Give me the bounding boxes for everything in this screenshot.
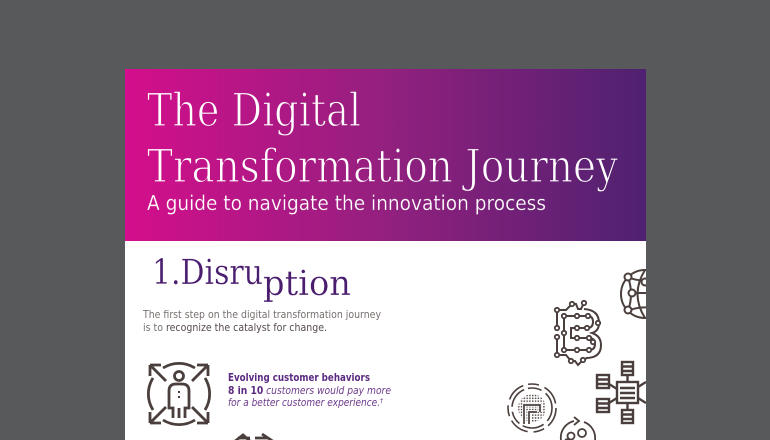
intro text: is to recognize the catalyst for change. <box>143 321 327 334</box>
title: Transformation Journey <box>147 139 618 193</box>
icon: circular arrow with people <box>561 417 595 440</box>
callout: evolving customer behaviors: † <box>380 397 383 405</box>
callout: evolving customer behaviors: Evolving customer behaviors <box>228 371 370 384</box>
callout: evolving customer behaviors: 8 in 10 customers would pay more <box>228 384 391 397</box>
icons clipped at page edge <box>507 269 646 440</box>
header banner <box>125 69 646 241</box>
intro text <box>142 308 382 334</box>
title <box>147 83 618 193</box>
subtitle: A guide to navigate the innovation process <box>147 191 546 215</box>
icon: bitcoin circuit <box>555 301 601 365</box>
callout: evolving customer behaviors: for a better customer experience. <box>228 396 411 409</box>
callout: evolving customer behaviors <box>228 371 391 409</box>
icon: double arrows, cropped <box>234 434 274 440</box>
title: The Digital <box>147 83 361 137</box>
heading: 1.Disruption <box>152 253 351 304</box>
intro text: The first step on the digital transformation journey <box>142 308 382 321</box>
heading: 1.Disruption: 1.Disru <box>152 253 263 293</box>
icon: server network <box>597 362 646 423</box>
icon: person with outward arrows <box>148 363 210 425</box>
panel: white page <box>125 241 646 440</box>
icon: globe network <box>620 269 646 319</box>
heading: 1.Disruption: ption <box>263 264 351 304</box>
icon: digital fingerprint circle <box>508 384 556 432</box>
